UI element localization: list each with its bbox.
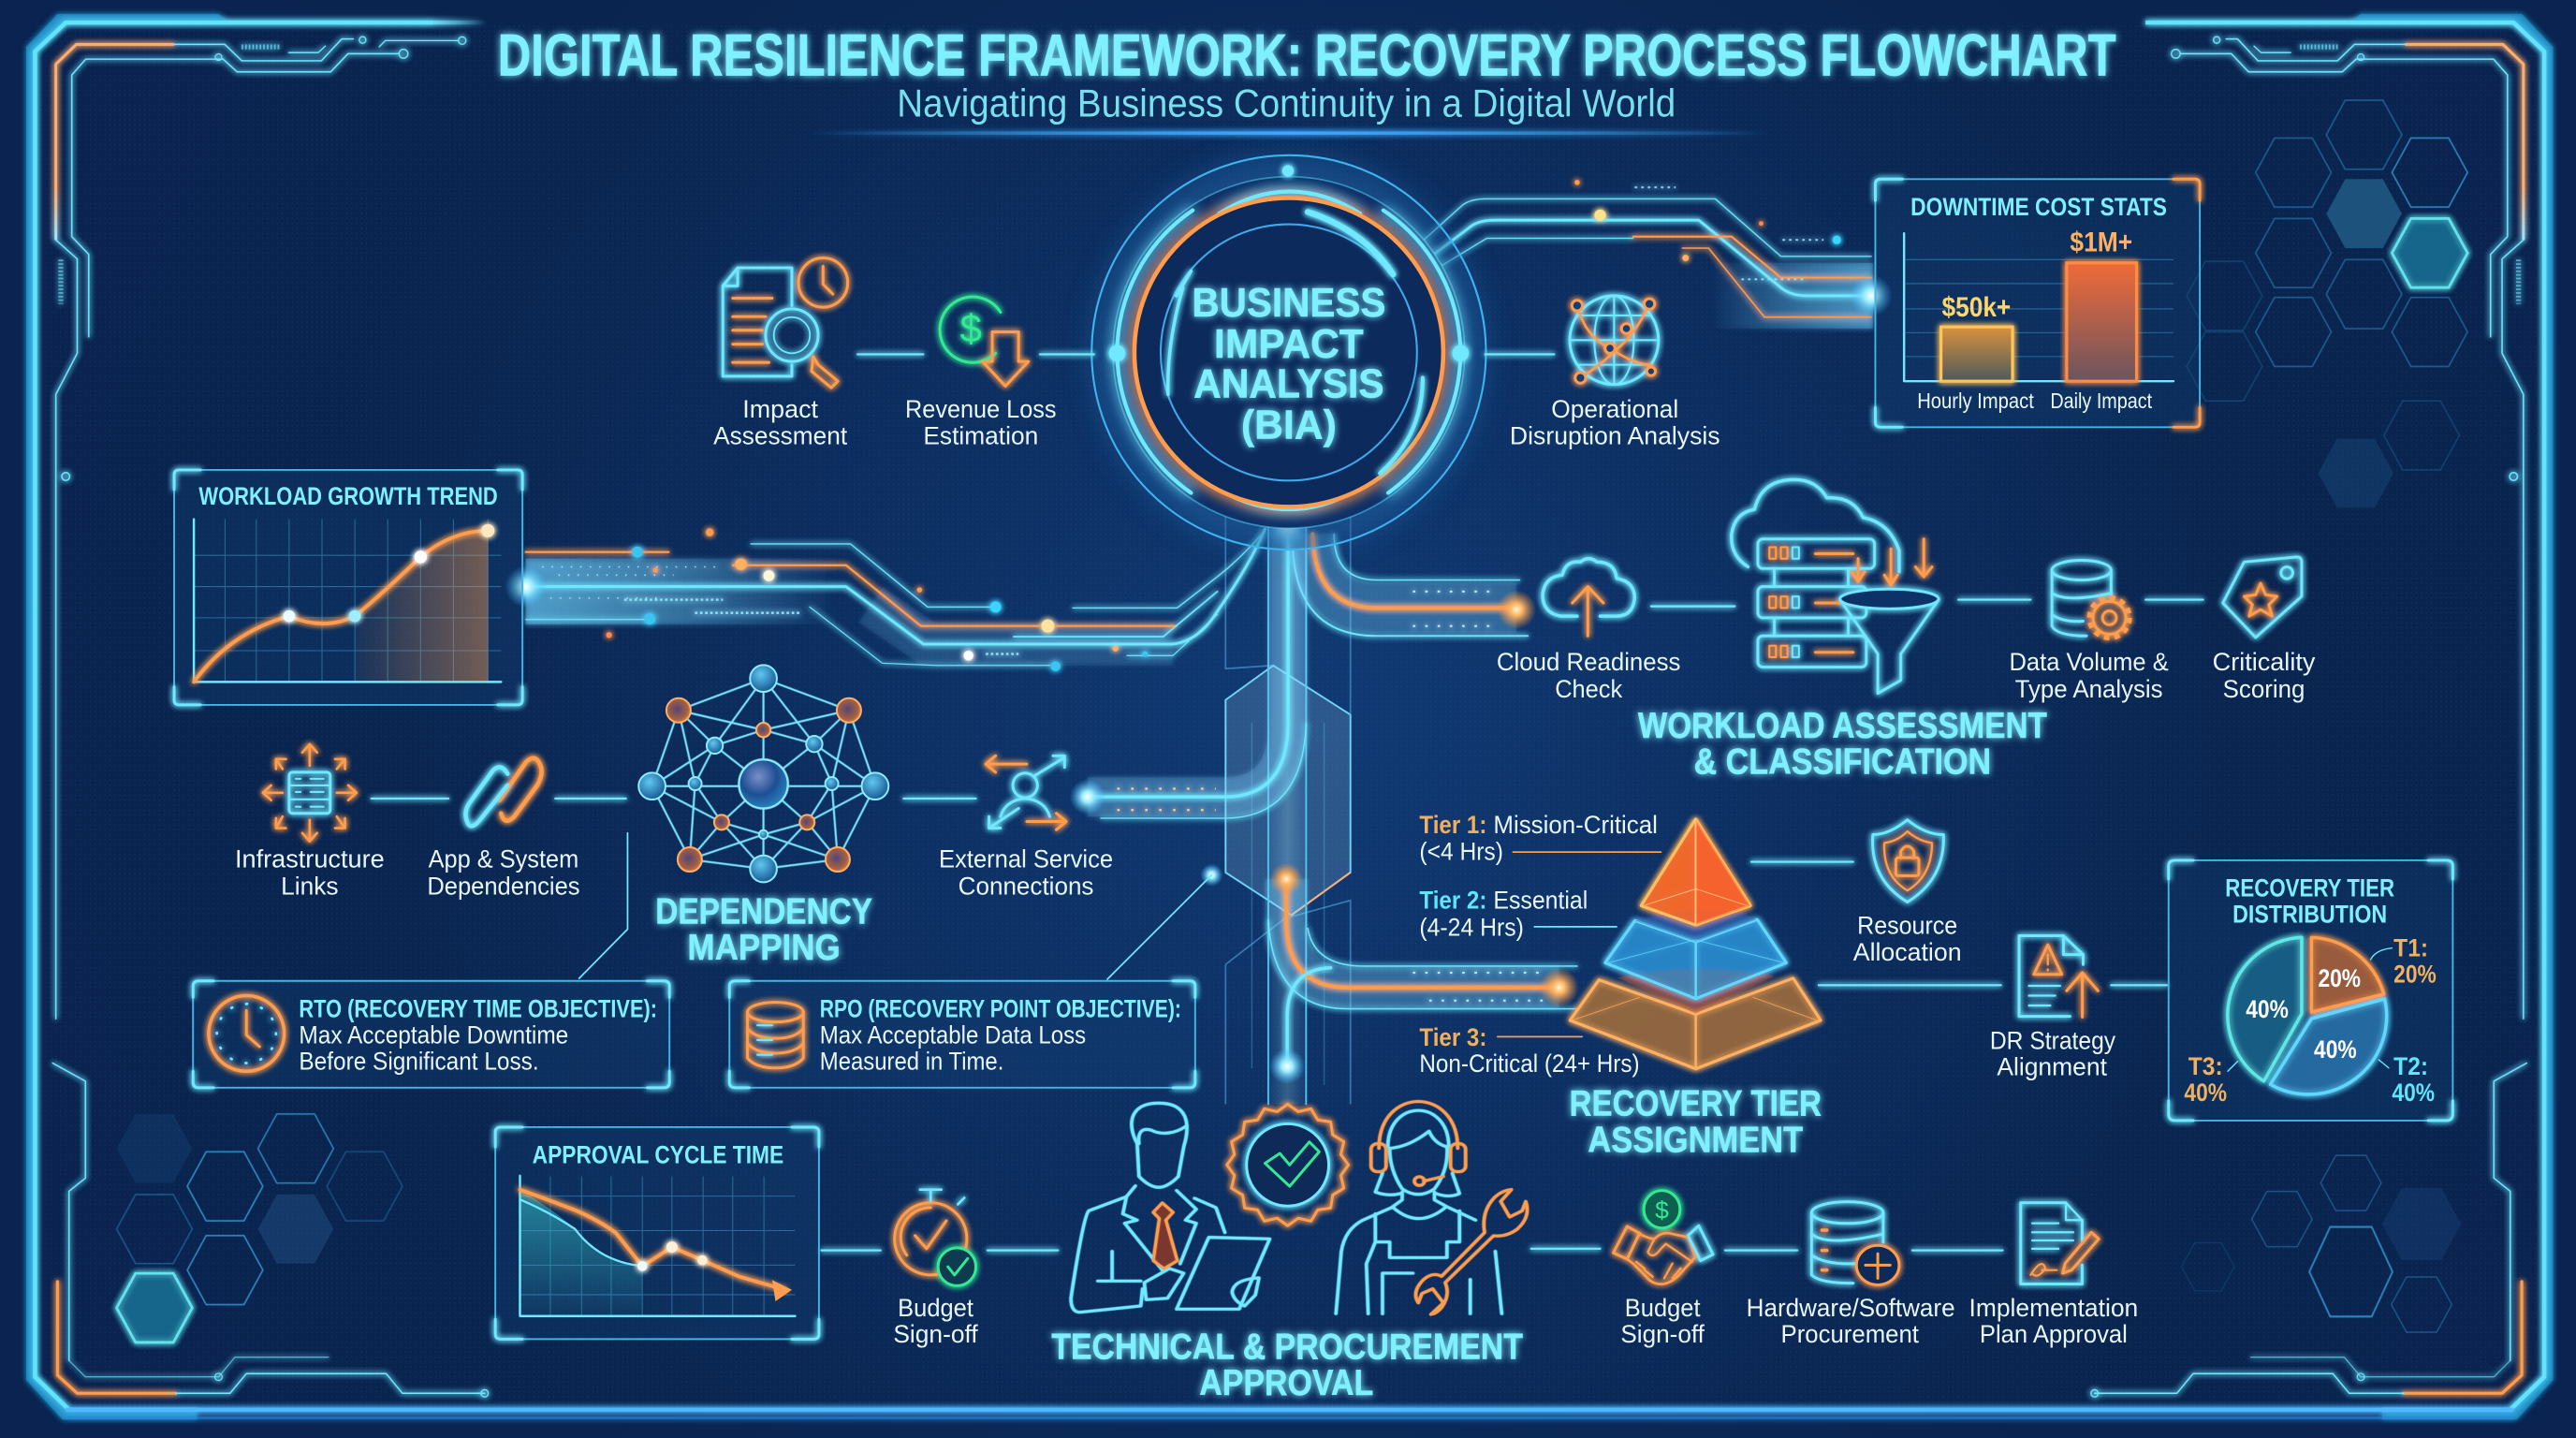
label: cloud readiness check: Check <box>1555 674 1623 703</box>
icon: dependency mapping network <box>638 665 888 882</box>
label: DR strategy alignment: DR Strategy <box>1990 1026 2115 1055</box>
label: operational disruption analysis: Disruption Analysis <box>1510 421 1720 450</box>
tier labels <box>1419 810 1661 1078</box>
label: resource allocation <box>1853 911 1962 966</box>
icon: approval badge <box>1227 1104 1349 1225</box>
heading: technical and procurement approval: APPROVAL <box>1199 1363 1373 1403</box>
central trunk with hexagon overlays <box>1225 493 1351 1104</box>
panel: workload growth trend <box>174 470 522 705</box>
label: infrastructure links: Infrastructure <box>235 844 385 873</box>
title: DIGITAL RESILIENCE FRAMEWORK: RECOVERY PROCESS FLOWCHART <box>498 23 2116 89</box>
label: budget sign-off left: Sign-off <box>893 1319 978 1348</box>
icon: data volume and type analysis <box>2052 560 2130 638</box>
label: budget sign-off right: Sign-off <box>1620 1319 1705 1348</box>
icon: budget sign-off stopwatch <box>895 1190 976 1285</box>
panel: recovery tier distribution: T2: <box>2393 1051 2428 1080</box>
connector lines between process steps <box>372 354 2203 1251</box>
panel: recovery tier distribution: 40% <box>2314 1034 2357 1064</box>
central node: Business Impact Analysis: BUSINESS <box>1192 280 1385 326</box>
central node: Business Impact Analysis <box>1091 155 1486 550</box>
icon: app and system chain link <box>465 758 542 826</box>
heading: dependency mapping: MAPPING <box>688 928 841 968</box>
icon: budget handshake: $ <box>1655 1196 1669 1224</box>
background hexagons: bottom left <box>117 1114 402 1343</box>
tier labels: Non-Critical (24+ Hrs) <box>1419 1049 1640 1078</box>
icon: criticality tag <box>2223 557 2302 638</box>
label: budget sign-off left: Budget <box>898 1293 973 1322</box>
label: DR strategy alignment: Alignment <box>1997 1052 2107 1081</box>
panel: recovery tier distribution: T3: <box>2188 1051 2223 1080</box>
label: impact assessment <box>713 394 848 450</box>
label: budget sign-off right <box>1620 1293 1705 1348</box>
callout leader lines <box>579 833 1211 979</box>
heading: workload assessment and classification <box>1638 706 2047 783</box>
panel: downtime cost stats: $50k+ <box>1942 292 2011 323</box>
label: revenue loss: Estimation <box>923 421 1038 450</box>
pie chart <box>2228 937 2387 1094</box>
label: app and system dependencies <box>427 844 580 901</box>
subtitle: Navigating Business Continuity in a Digital World <box>897 81 1676 125</box>
panel: workload growth trend: WORKLOAD GROWTH TREND <box>198 481 498 510</box>
icon: infrastructure links <box>263 744 357 842</box>
label: criticality scoring <box>2213 647 2316 703</box>
icon: implementation plan <box>2021 1203 2099 1284</box>
heading: technical and procurement approval <box>1051 1327 1523 1403</box>
bar: hourly impact <box>1941 327 2012 381</box>
flow pipes: trunk to cloud readiness <box>1293 534 1528 636</box>
heading: dependency mapping <box>655 891 872 968</box>
panel: RPO recovery point objective: Measured in Time. <box>820 1047 1003 1076</box>
label: operational disruption analysis: Operational <box>1551 394 1678 423</box>
heading: recovery tier assignment: RECOVERY TIER <box>1570 1084 1822 1124</box>
label: infrastructure links <box>235 844 385 901</box>
heading: recovery tier assignment: ASSIGNMENT <box>1588 1120 1804 1160</box>
label: implementation plan approval: Plan Approval <box>1980 1319 2128 1348</box>
label: external service connections <box>939 844 1113 901</box>
panel: recovery tier distribution <box>2169 860 2452 1121</box>
tier labels: Tier 3: <box>1419 1022 1486 1051</box>
label: data volume and type analysis <box>2009 647 2169 703</box>
heading: dependency mapping: DEPENDENCY <box>655 891 872 932</box>
central node: Business Impact Analysis: (BIA) <box>1241 403 1337 448</box>
label: cloud readiness check <box>1497 647 1680 703</box>
icon: cloud readiness <box>1543 559 1634 636</box>
label: resource allocation: Resource <box>1857 911 1957 940</box>
panel: downtime cost stats: Hourly Impact <box>1917 389 2034 413</box>
heading: workload assessment and classification: WORKLOAD ASSESSMENT <box>1638 706 2047 746</box>
label: resource allocation: Allocation <box>1853 937 1962 966</box>
tier labels: (<4 Hrs) <box>1419 837 1503 866</box>
panel: recovery tier distribution: 40% <box>2392 1078 2435 1107</box>
panel: RTO recovery time objective: Max Acceptable Downtime <box>299 1020 568 1049</box>
background hexagons: bottom right <box>2182 1155 2461 1332</box>
icon: revenue loss: $ <box>960 306 982 350</box>
tier labels: Tier 1: <box>1419 810 1486 839</box>
label: criticality scoring: Criticality <box>2213 647 2316 676</box>
panel: downtime cost stats: Daily Impact <box>2050 389 2153 413</box>
tier labels: Essential <box>1493 886 1588 915</box>
panel: recovery tier distribution: RECOVERY TIER <box>2225 873 2394 902</box>
pipe end nodes <box>505 274 1893 1084</box>
label: data volume and type analysis: Type Analysis <box>2015 674 2163 703</box>
label: hardware and software procurement: Procurement <box>1781 1319 1919 1348</box>
panel: recovery tier distribution: T1: <box>2393 932 2428 961</box>
icon: workload classification servers and funnel <box>1732 479 1939 694</box>
label: cloud readiness check: Cloud Readiness <box>1497 647 1680 676</box>
label: impact assessment: Assessment <box>713 421 848 450</box>
central node: Business Impact Analysis: IMPACT <box>1214 321 1364 367</box>
icon: hardware and software procurement <box>1811 1202 1899 1284</box>
panel: RTO recovery time objective <box>193 981 669 1088</box>
label: hardware and software procurement <box>1747 1293 1955 1348</box>
label: criticality scoring: Scoring <box>2223 674 2305 703</box>
label: implementation plan approval: Implementation <box>1969 1293 2138 1322</box>
heading: workload assessment and classification: & CLASSIFICATION <box>1694 742 1991 783</box>
panel: recovery tier distribution: 40% <box>2246 994 2289 1023</box>
label: app and system dependencies: App & System <box>429 844 578 873</box>
tier labels: Tier 2: <box>1419 886 1486 915</box>
tier labels: Mission-Critical <box>1493 810 1658 839</box>
panel: recovery tier distribution: 20% <box>2393 960 2437 989</box>
label: revenue loss: Revenue Loss <box>905 394 1057 423</box>
illustration: technician with wrench <box>1336 1102 1528 1314</box>
panel: RPO recovery point objective: RPO (RECOVERY POINT OBJECTIVE): <box>820 993 1181 1022</box>
icon: revenue loss <box>940 297 1029 386</box>
panel: recovery tier distribution: 20% <box>2318 963 2361 992</box>
background hexagons: top right <box>2187 100 2467 507</box>
label: data volume and type analysis: Data Volume & <box>2009 647 2169 676</box>
icon: operational disruption globe <box>1570 296 1659 385</box>
illustration: businessman with tablet <box>1071 1103 1269 1313</box>
bar: daily impact <box>2067 263 2137 381</box>
label: DR strategy alignment <box>1990 1026 2115 1081</box>
label: budget sign-off right: Budget <box>1625 1293 1701 1322</box>
label: external service connections: External Service <box>939 844 1113 873</box>
icon: impact assessment <box>723 258 848 388</box>
label: budget sign-off left <box>893 1293 978 1348</box>
flow pipes: workload growth to BIA <box>526 528 1265 671</box>
panel: downtime cost stats: $1M+ <box>2070 227 2132 258</box>
panel: approval cycle time: APPROVAL CYCLE TIME <box>533 1140 783 1169</box>
panel: RPO recovery point objective <box>729 981 1195 1088</box>
label: impact assessment: Impact <box>742 394 818 423</box>
icon: external service connections <box>986 756 1066 829</box>
panel: RTO recovery time objective: RTO (RECOVERY TIME OBJECTIVE): <box>299 993 657 1022</box>
icon: DR strategy document <box>2019 935 2098 1017</box>
label: external service connections: Connections <box>959 872 1093 901</box>
label: hardware and software procurement: Hardware/Software <box>1747 1293 1955 1322</box>
icon: database <box>748 1003 803 1068</box>
label: infrastructure links: Links <box>281 872 339 901</box>
flow pipes: BIA to downtime cost stats <box>1412 180 1873 329</box>
panel: downtime cost stats: DOWNTIME COST STATS <box>1910 192 2167 221</box>
central node: Business Impact Analysis: ANALYSIS <box>1193 361 1384 407</box>
icon: recovery tier pyramid <box>1570 819 1821 1069</box>
flow pipes: trunk to external services <box>1088 529 1306 818</box>
panel: RPO recovery point objective: Max Acceptable Data Loss <box>820 1020 1086 1049</box>
label: implementation plan approval <box>1969 1293 2138 1348</box>
flow pipes: trunk to recovery tiers <box>1268 879 1577 1066</box>
panel: downtime cost stats <box>1875 179 2200 427</box>
panel: recovery tier distribution: 40% <box>2184 1078 2227 1107</box>
label: operational disruption analysis <box>1510 394 1720 450</box>
label: app and system dependencies: Dependencies <box>427 872 580 901</box>
label: revenue loss <box>905 394 1057 450</box>
icon: clock <box>209 996 285 1071</box>
panel: RTO recovery time objective: Before Significant Loss. <box>299 1047 539 1076</box>
panel: approval cycle time <box>495 1127 819 1339</box>
icon: resource allocation shield <box>1873 820 1943 902</box>
heading: recovery tier assignment <box>1570 1084 1822 1160</box>
tier labels: (4-24 Hrs) <box>1419 912 1524 941</box>
panel: recovery tier distribution: DISTRIBUTION <box>2232 899 2387 928</box>
icon: budget handshake <box>1614 1191 1713 1284</box>
heading: technical and procurement approval: TECHNICAL & PROCUREMENT <box>1051 1327 1523 1367</box>
